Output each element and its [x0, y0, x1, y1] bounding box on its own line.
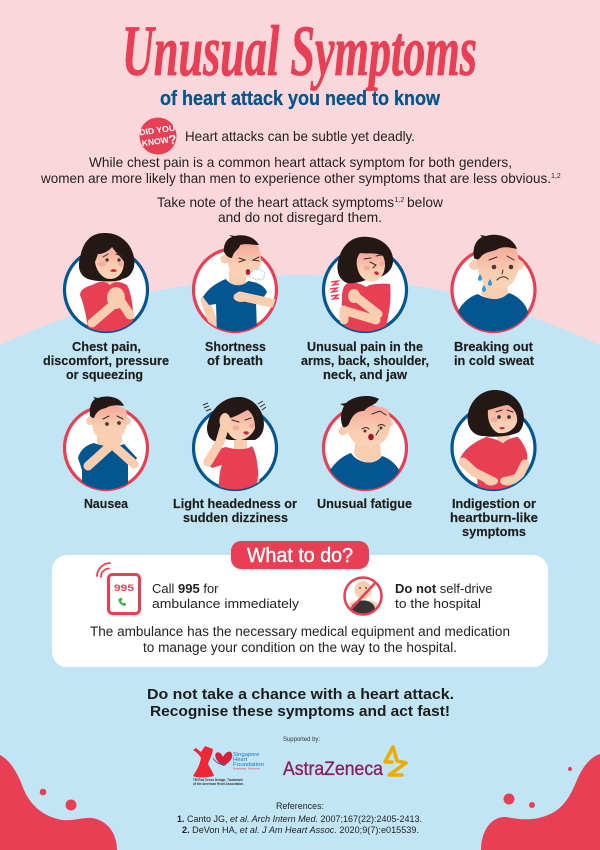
symptom 8 label: heartburn-like — [450, 510, 538, 525]
logo: Singapore Heart Foundation: Foundation — [233, 762, 264, 768]
symptom 8 label: symptoms — [462, 524, 526, 539]
symptom 6 label: sudden dizziness — [183, 510, 288, 525]
symptom 4 label: in cold sweat — [454, 353, 535, 368]
symptom 4 label: Breaking out — [454, 339, 534, 354]
closing message — [147, 686, 454, 720]
symptom 4: cold sweat illustration — [452, 235, 535, 334]
symptom 5 label: Nausea — [84, 496, 129, 511]
do not self-drive text: to the hospital — [395, 596, 481, 611]
logo: Singapore Heart Foundation: TM Red Dress Design, Trademark — [193, 777, 244, 782]
call 995 text — [152, 581, 300, 611]
icon: did you know badge: DID YOU — [139, 123, 176, 138]
logo: AstraZeneca — [283, 747, 406, 780]
symptom 5: nausea illustration — [64, 397, 148, 492]
symptom 1 label: Chest pain, — [72, 339, 141, 354]
symptom 3 label: Unusual pain in the — [307, 339, 423, 354]
ambulance explanation: to manage your condition on the way to the hospital. — [143, 640, 457, 655]
symptom 1 label — [43, 339, 169, 382]
symptom 3 label — [301, 339, 429, 382]
intro paragraph: While chest pain is a common heart attack symptom for both genders, — [89, 154, 512, 170]
subtitle: of heart attack you need to know — [160, 88, 440, 110]
supported by: Supported by: — [283, 736, 320, 743]
logo: AstraZeneca: AstraZeneca — [283, 758, 383, 780]
symptom 1 label: or squeezing — [66, 367, 143, 382]
decoration: left red blob and dots — [0, 755, 117, 850]
logo: Singapore Heart Foundation: Singapore — [233, 752, 259, 758]
icon: phone 995: 995 — [114, 583, 135, 594]
take note paragraph: and do not disregard them. — [218, 209, 382, 225]
do not self-drive text: Do not self-drive — [395, 581, 493, 596]
logo: Singapore Heart Foundation — [193, 746, 264, 786]
symptom 2: shortness of breath illustration — [194, 235, 276, 334]
intro paragraph: women are more likely than men to experience other symptoms that are less obvious. — [40, 170, 551, 186]
symptom 2 label: Shortness — [205, 339, 266, 354]
symptom 1 label: discomfort, pressure — [43, 353, 169, 368]
references — [177, 801, 422, 836]
symptom 1: chest pain illustration — [64, 233, 148, 334]
symptom 2 label: of breath — [207, 353, 263, 368]
closing message: Recognise these symptoms and act fast! — [150, 703, 450, 720]
symptom 2 label — [205, 339, 266, 368]
do not self-drive text — [395, 581, 493, 611]
decoration: right red blob and dots — [481, 754, 600, 850]
logo: Singapore Heart Foundation: Heart — [233, 757, 248, 763]
take note paragraph: 1,2 — [394, 197, 404, 204]
symptom 8 label: Indigestion or — [452, 496, 536, 511]
symptom 6: dizziness illustration — [194, 397, 276, 492]
icon: no self-driving — [344, 578, 382, 618]
symptom 6 label: Light headedness or — [173, 496, 297, 511]
intro line: Heart attacks can be subtle yet deadly. — [185, 128, 415, 144]
take note paragraph: below — [407, 194, 444, 210]
symptom 7 label: Unusual fatigue — [317, 496, 412, 511]
call 995 text: ambulance immediately — [152, 596, 300, 611]
ambulance explanation: The ambulance has the necessary medical equipment and medication — [90, 624, 510, 639]
heading pill: what to do — [231, 541, 369, 569]
icon: did you know badge — [139, 118, 178, 154]
background: blue curved lower area — [0, 275, 600, 850]
references: 1. Canto JG, et al. Arch Intern Med. 2007;167(22):2405-2413. — [177, 814, 422, 825]
symptom 4 label — [454, 339, 535, 368]
symptom 8: indigestion illustration — [452, 390, 535, 492]
closing message: Do not take a chance with a heart attack. — [147, 686, 454, 703]
panel: what to do — [52, 541, 548, 667]
intro paragraph: 1,2 — [551, 173, 561, 180]
intro paragraph — [40, 154, 561, 186]
symptom 8 label — [450, 496, 538, 539]
icon: did you know badge: ? — [168, 132, 178, 147]
heading pill: what to do: What to do? — [247, 545, 353, 567]
logo: Singapore Heart Foundation: Heartbeat. Wellness — [233, 766, 260, 770]
icon: phone 995 — [97, 563, 140, 614]
icon: did you know badge: KNOW — [141, 134, 170, 148]
take note paragraph — [157, 194, 444, 225]
call 995 text: Call 995 for — [152, 581, 219, 596]
references: 2. DeVon HA, et al. J Am Heart Assoc. 2020;9(7):e015539. — [182, 825, 419, 836]
ambulance explanation — [90, 624, 510, 655]
symptom 3 label: arms, back, shoulder, — [301, 353, 429, 368]
symptom 7: fatigue illustration — [324, 396, 406, 492]
symptom 6 label — [173, 496, 297, 525]
logo: Singapore Heart Foundation: of the American Heart Association. — [193, 781, 244, 786]
references: References: — [276, 801, 324, 812]
symptom 3 label: neck, and jaw — [323, 367, 408, 382]
take note paragraph: Take note of the heart attack symptoms — [157, 194, 394, 210]
symptom 3: arm and shoulder pain illustration — [324, 237, 406, 334]
